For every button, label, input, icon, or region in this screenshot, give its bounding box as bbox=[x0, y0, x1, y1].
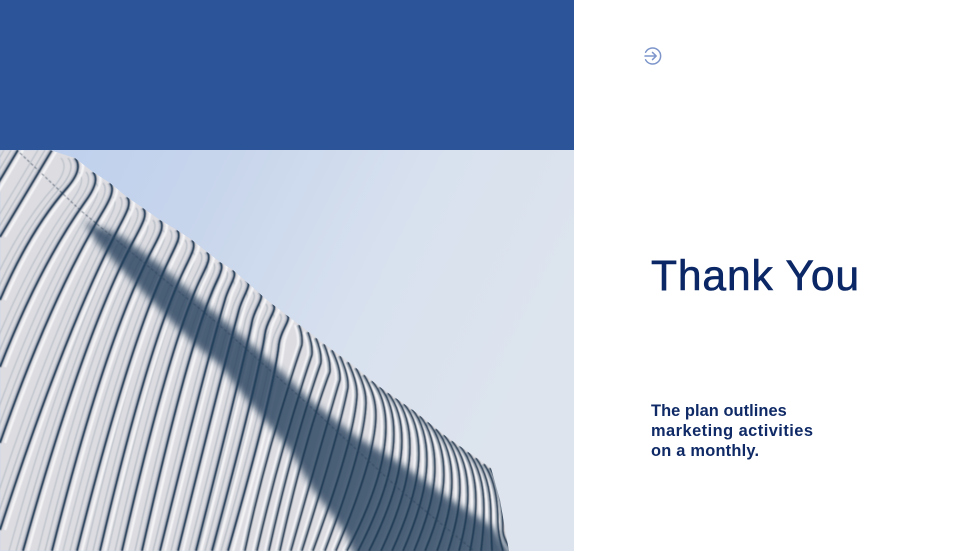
body text: on a monthly. bbox=[651, 442, 759, 460]
blue header panel bbox=[0, 0, 574, 150]
dark rib lines bbox=[0, 150, 288, 551]
icon: arrow entering circle bbox=[644, 47, 662, 65]
sky background bbox=[0, 150, 574, 551]
cast shadow bbox=[85, 222, 515, 551]
photo: corrugated metal building against the sky bbox=[0, 150, 574, 551]
body text: The plan outlines bbox=[651, 402, 787, 420]
body text: marketing activities bbox=[651, 422, 813, 440]
title: Thank You bbox=[651, 252, 860, 300]
seam line bbox=[20, 153, 473, 550]
rib halos bbox=[0, 150, 287, 551]
building roof bbox=[0, 150, 520, 551]
body text bbox=[651, 402, 813, 460]
